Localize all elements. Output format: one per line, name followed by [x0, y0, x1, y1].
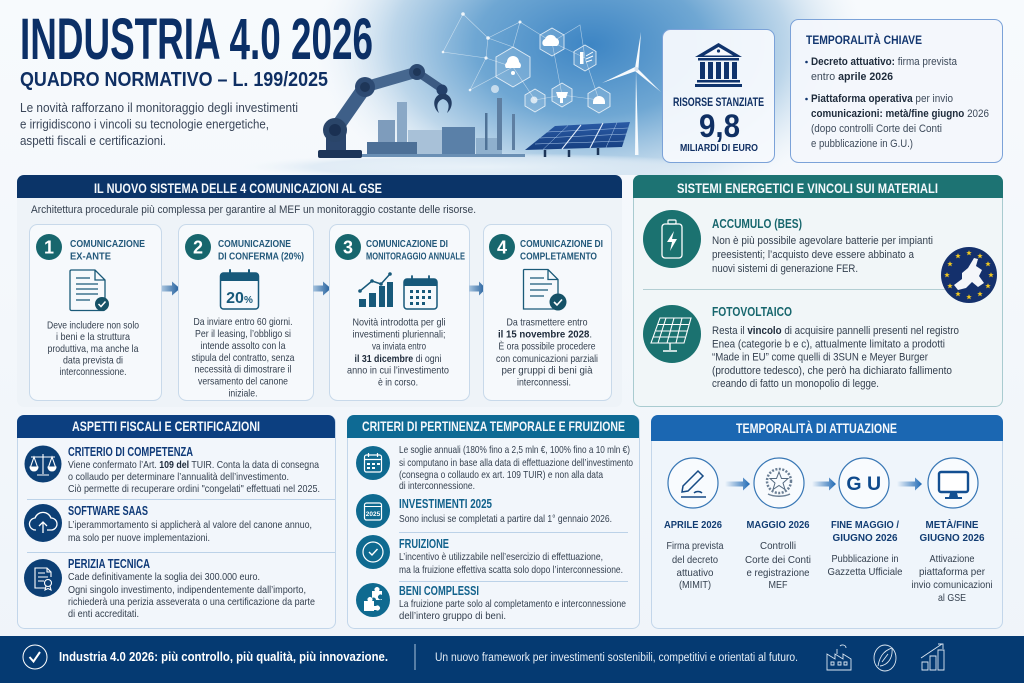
- card text: data prevista di: [63, 354, 123, 366]
- panel: aspetti fiscali: [17, 415, 336, 628]
- step: maggio 2026: Controlli: [760, 540, 796, 552]
- panel header: IL NUOVO SISTEMA DELLE 4 COMUNICAZIONI AL GSE: [94, 180, 382, 196]
- perizia tecnica: richiederà una perizia asseverata o una certificazione da parte: [68, 596, 315, 608]
- panel: sistema comunicazioni GSE: [17, 175, 622, 407]
- soglie annuali: Le soglie annuali (180% fino a 2,5 mln €, 100% fino a 10 mln €): [399, 444, 630, 456]
- card text: interconnessi.: [517, 376, 571, 388]
- criterio di competenza: Ciò permette di recuperare ordini "congelati" effettuati nel 2025.: [68, 483, 320, 495]
- card 2: COMUNICAZIONE: [218, 239, 291, 250]
- icon: scales: [24, 446, 62, 482]
- step: maggio 2026: [745, 458, 811, 591]
- panel header: [633, 175, 1003, 198]
- soglie annuali: si computano in base alla data di effettuazione dell’investimento: [399, 457, 633, 469]
- step: aprile 2026: (MIMIT): [679, 579, 711, 591]
- step: fine maggio: Pubblicazione in: [832, 553, 899, 565]
- icon: calendar 20%: 20%: [226, 290, 253, 307]
- step: maggio 2026: MEF: [768, 579, 788, 591]
- card text: il 31 dicembre di ogni: [354, 353, 442, 365]
- icon: battery: [643, 210, 701, 268]
- criterio di competenza: [68, 445, 320, 495]
- step: metà/fine giugno: al GSE: [938, 592, 966, 604]
- fotovoltaico text: creando di fatto un monopolio di legge.: [712, 378, 879, 390]
- panel header: [651, 415, 1003, 441]
- panel: criteri di pertinenza: [347, 415, 640, 628]
- card text: [47, 320, 139, 378]
- card text: Per il leasing, l’obbligo si: [195, 328, 291, 340]
- soglie annuali: (consegna o collaudo ex art. 109 TUIR) e non alla data: [399, 469, 603, 481]
- step: maggio 2026: e registrazione: [746, 567, 810, 579]
- card text: anno in cui l’investimento: [347, 364, 449, 376]
- intro text: e irrigidiscono i vincoli su tecnologie energetiche,: [20, 116, 269, 132]
- card 4: COMPLETAMENTO: [520, 252, 597, 262]
- step: metà/fine giugno: piattaforma per: [919, 566, 985, 578]
- card text: Da trasmettere entro: [506, 316, 588, 328]
- robot arm: [318, 64, 452, 158]
- card text: [347, 316, 449, 388]
- card text: investimenti pluriennali;: [352, 328, 446, 340]
- icon: institution building: [695, 43, 742, 87]
- bullet list: Piattaforma operativa per invio: [811, 93, 953, 105]
- stat: 9,8 miliardi: MILIARDI DI EURO: [680, 142, 758, 154]
- beni complessi: dell’intero gruppo di beni.: [399, 610, 506, 622]
- card text: iniziale.: [228, 388, 258, 400]
- card text: Novità introdotta per gli: [352, 316, 446, 328]
- icon: EU flag globe: [941, 247, 997, 303]
- card 4: [484, 224, 612, 400]
- intro text: [20, 100, 298, 148]
- fotovoltaico text: “Made in EU” come quelli di 3SUN e Meyer Burger: [712, 352, 928, 364]
- panel header: SISTEMI ENERGETICI E VINCOLI SUI MATERIALI: [677, 180, 938, 196]
- bullet list: (dopo controlli Corte dei Conti: [811, 123, 942, 135]
- card 4: COMUNICAZIONE DI: [520, 239, 603, 250]
- icon: calendar 2025: [356, 494, 390, 528]
- subtitle: QUADRO NORMATIVO – L. 199/2025: [20, 69, 328, 91]
- fruizione: L’incentivo è utilizzabile nell’esercizio di effettuazione,: [399, 551, 603, 563]
- step: aprile 2026: attuativo: [676, 567, 714, 579]
- accumulo text: nuovi sistemi di generazione FER.: [712, 263, 858, 275]
- arrow: [725, 478, 750, 490]
- investimenti 2025: [399, 497, 612, 525]
- step: maggio 2026: Corte dei Conti: [745, 554, 811, 566]
- card text: [496, 316, 598, 388]
- step: fine maggio: GIUGNO 2026: [832, 532, 898, 544]
- panel header: ASPETTI FISCALI E CERTIFICAZIONI: [72, 418, 260, 434]
- step: metà/fine giugno: METÀ/FINE: [926, 518, 978, 531]
- solar panels: [525, 122, 630, 157]
- card 1: COMUNICAZIONE: [70, 239, 145, 250]
- arrow: 2 to 3: [313, 282, 331, 296]
- card 2: 2: [193, 238, 203, 258]
- accumulo text: [712, 217, 933, 275]
- stat: 9,8 miliardi: [673, 95, 764, 154]
- card 3: MONITORAGGIO ANNUALE: [366, 252, 465, 262]
- arrow: [812, 478, 836, 490]
- beni complessi: BENI COMPLESSI: [399, 584, 479, 598]
- perizia tecnica: Ogni singolo investimento, indipendentemente dall’importo,: [68, 584, 306, 596]
- card text: intende assolto con la: [200, 340, 286, 352]
- card text: necessità di dimostrare il: [194, 364, 292, 376]
- icon: calendar: [404, 276, 437, 309]
- accumulo text: preesistenti; l’acquisto deve essere abbinato a: [712, 249, 915, 261]
- card 2: [178, 224, 314, 400]
- card text: stipula del contratto, senza: [192, 352, 295, 364]
- hero background illustration: [282, 0, 838, 175]
- step: fine maggio: Gazzetta Ufficiale: [828, 566, 903, 578]
- card 2: DI CONFERMA (20%): [218, 252, 304, 262]
- accumulo text: Non è più possibile agevolare batterie per impianti: [712, 235, 933, 247]
- card 1: EX-ANTE: [70, 252, 111, 262]
- card text: va inviata entro: [372, 340, 426, 352]
- icon: leaf: [874, 645, 896, 671]
- step: fine maggio: U: [867, 473, 881, 495]
- panel: temporalità chiave: [790, 20, 1002, 162]
- bullet list: e pubblicazione in G.U.): [811, 138, 913, 150]
- icon: calendar 20%: [220, 270, 258, 309]
- panel: risorse stanziate: [662, 30, 774, 162]
- icon: calendar grid: [356, 446, 390, 480]
- panel header: CRITERI DI PERTINENZA TEMPORALE E FRUIZIONE: [362, 418, 625, 434]
- step: aprile 2026: del decreto: [672, 554, 718, 566]
- perizia tecnica: [68, 557, 315, 620]
- wind turbine: [602, 32, 661, 155]
- step: metà/fine giugno: Attivazione: [930, 553, 975, 565]
- accumulo text: ACCUMULO (BES): [712, 217, 802, 231]
- card 4: 4: [497, 238, 507, 258]
- network lines: [443, 14, 599, 100]
- step: metà/fine giugno: GIUGNO 2026: [920, 532, 985, 544]
- beni complessi: [399, 584, 626, 622]
- heading: TEMPORALITÀ CHIAVE: [806, 32, 922, 47]
- bullet list: entro aprile 2026: [811, 71, 893, 83]
- icon: factory: [827, 645, 851, 670]
- fruizione: FRUIZIONE: [399, 537, 449, 551]
- fotovoltaico text: FOTOVOLTAICO: [712, 305, 792, 319]
- icon: check circle: [356, 535, 390, 569]
- card text: i beni e la struttura: [56, 331, 130, 343]
- criterio di competenza: o collaudo per determinare l’annualità dell’investimento.: [68, 471, 289, 483]
- panel header: [17, 175, 622, 198]
- criterio di competenza: Viene confermato l’Art. 109 del TUIR. Conta la data di consegna: [68, 459, 319, 471]
- footer message: Industria 4.0 2026: più controllo, più qualità, più innovazione.: [59, 650, 388, 664]
- icon: document with check: [70, 270, 109, 311]
- fotovoltaico text: [712, 305, 959, 390]
- beni complessi: La fruizione parte solo al completamento e interconnessione: [399, 598, 626, 610]
- panel: sistemi energetici: [633, 175, 1003, 406]
- arrow: [897, 478, 922, 490]
- icon: calendar 2025: 2025: [366, 511, 381, 518]
- software saas: SOFTWARE SAAS: [68, 504, 148, 518]
- software saas: ma solo per nuove implementazioni.: [68, 532, 210, 544]
- card 3: 3: [343, 238, 353, 258]
- panel header: [17, 415, 335, 438]
- investimenti 2025: Sono inclusi se completati a partire dal 1° gennaio 2026.: [399, 513, 612, 525]
- step: fine maggio: [828, 458, 903, 578]
- software saas: [68, 504, 312, 544]
- icon: document with check: [524, 270, 566, 310]
- intro text: aspetti fiscali e certificazioni.: [20, 133, 166, 148]
- investimenti 2025: INVESTIMENTI 2025: [399, 497, 492, 511]
- icon: growth chart: [358, 272, 393, 307]
- panel header: TEMPORALITÀ DI ATTUAZIONE: [736, 420, 897, 436]
- icon: cloud upload: [24, 504, 62, 542]
- card 1: [30, 224, 162, 400]
- perizia tecnica: PERIZIA TECNICA: [68, 557, 150, 571]
- arrow: 1 to 2: [162, 282, 180, 296]
- card text: il 15 novembre 2028.: [498, 328, 592, 340]
- fotovoltaico text: Resta il vincolo di acquisire pannelli presenti nel registro: [712, 325, 959, 337]
- icon: solar panel: [643, 305, 701, 363]
- card text: Deve includere non solo: [47, 320, 139, 332]
- footer tagline: Un nuovo framework per investimenti sostenibili, competitivi e orientati al futuro.: [435, 652, 798, 664]
- fruizione: [399, 537, 623, 576]
- software saas: L’iperammortamento si applicherà al valore del canone annuo,: [68, 519, 312, 531]
- stat: 9,8 miliardi: RISORSE STANZIATE: [673, 95, 764, 109]
- card text: interconnessione.: [60, 366, 126, 378]
- icon: puzzle: [356, 583, 390, 617]
- card text: con comunicazioni parziali: [496, 353, 598, 365]
- bullet list: [805, 56, 989, 150]
- step: metà/fine giugno: invio comunicazioni: [912, 579, 992, 591]
- step: metà/fine giugno: [912, 458, 992, 604]
- panel intro: Architettura procedurale più complessa per garantire al MEF un monitoraggio costante delle risorse.: [31, 204, 476, 216]
- footer banner: [0, 636, 1024, 683]
- card 3: [330, 224, 470, 400]
- card text: versamento del canone: [198, 376, 288, 388]
- title: INDUSTRIA 4.0 2026: [20, 7, 373, 72]
- factory: [367, 98, 515, 155]
- card 1: 1: [44, 238, 54, 258]
- step: aprile 2026: Firma prevista: [666, 540, 724, 552]
- fruizione: ma la fruizione effettiva scatta solo dopo l’interconnessione.: [399, 564, 623, 576]
- icon: certified document: [24, 559, 62, 597]
- hexagons: [496, 28, 610, 113]
- perizia tecnica: Cade definitivamente la soglia dei 300.000 euro.: [68, 571, 260, 583]
- perizia tecnica: di enti accreditati.: [68, 608, 139, 620]
- step: maggio 2026: MAGGIO 2026: [746, 519, 810, 531]
- criterio di competenza: CRITERIO DI COMPETENZA: [68, 445, 193, 459]
- soglie annuali: [399, 444, 633, 492]
- soglie annuali: di interconnessione.: [399, 480, 475, 492]
- icon: growth chart: [921, 644, 944, 670]
- step: fine maggio: G: [846, 473, 862, 495]
- card text: produttiva, ma anche la: [48, 343, 139, 355]
- fotovoltaico text: Enea (categorie b e c), attualmente limitato a prodotti: [712, 338, 945, 350]
- panel: temporalità di attuazione: [651, 415, 1003, 628]
- step: aprile 2026: APRILE 2026: [664, 519, 722, 531]
- card text: È ora possibile procedere: [498, 340, 596, 352]
- step: fine maggio: FINE MAGGIO /: [831, 519, 899, 531]
- card text: Da inviare entro 60 giorni.: [194, 316, 292, 328]
- bullet list: Decreto attuativo: firma prevista: [811, 56, 958, 68]
- card text: è in corso.: [378, 376, 418, 388]
- arrow: 3 to 4: [469, 282, 486, 296]
- panel header: [347, 415, 639, 438]
- stat: 9,8 miliardi: 9,8: [699, 108, 740, 144]
- card text: [192, 316, 295, 400]
- fotovoltaico text: (produttore tedesco), che però ha dichiarato fallimento: [712, 365, 952, 377]
- card text: per gruppi di beni già: [502, 364, 593, 376]
- intro text: Le novità rafforzano il monitoraggio degli investimenti: [20, 100, 298, 115]
- icon: footer check: [23, 645, 47, 669]
- bullet list: comunicazioni: metà/fine giugno 2026: [811, 108, 989, 120]
- card 3: COMUNICAZIONE DI: [366, 239, 448, 250]
- step: aprile 2026: [664, 458, 724, 591]
